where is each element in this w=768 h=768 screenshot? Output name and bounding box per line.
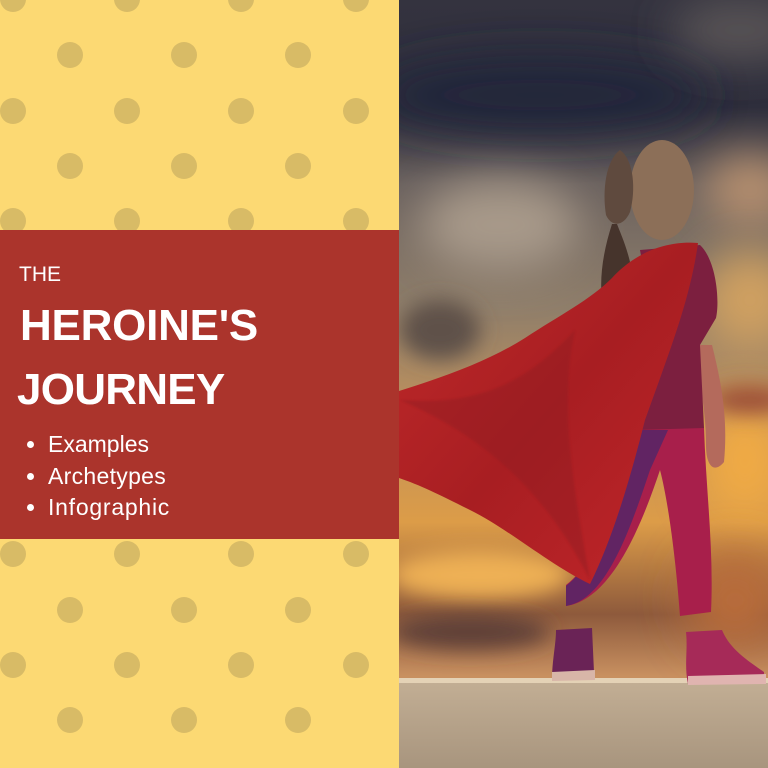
text: THE: THE <box>19 263 61 286</box>
photo: girl in red cape against sunset sky <box>399 0 768 768</box>
heading: JOURNEY: JOURNEY <box>17 365 224 414</box>
panel: red title banner <box>0 230 399 539</box>
bullet list: Archetypes <box>48 462 166 488</box>
clouds and sunset glow <box>370 0 768 650</box>
ledge <box>399 678 768 768</box>
shoes <box>552 628 766 685</box>
girl: arm and legs <box>566 345 725 616</box>
panel: yellow polka dot background <box>0 0 399 768</box>
bullet list: Infographic <box>48 494 170 520</box>
bullet list <box>27 431 170 520</box>
girl: shirt <box>636 245 717 430</box>
red cape <box>399 243 698 584</box>
bullet list: Examples <box>48 431 149 457</box>
heading: HEROINE'S: HEROINE'S <box>20 301 258 350</box>
girl: hair <box>601 140 694 312</box>
